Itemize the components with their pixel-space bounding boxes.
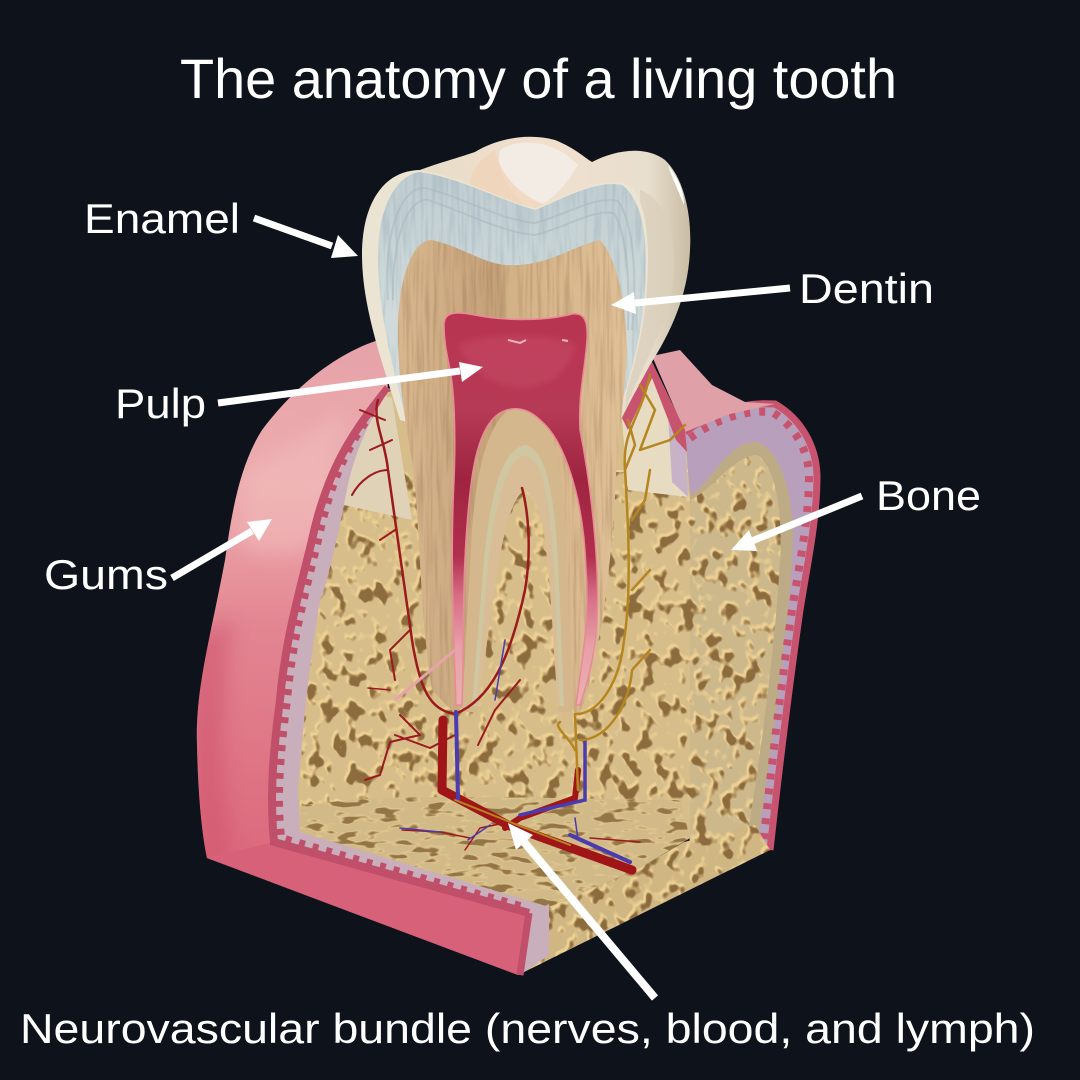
label: Bone [731,472,981,551]
illustration: tooth in jaw cross-section [190,137,817,980]
tooth: dentin [396,238,628,718]
arrow: Dentin [611,288,790,314]
label: Neurovascular bundle [20,823,1035,1052]
label: Pulp: Pulp [115,380,206,427]
label: Bone: Bone [876,472,981,519]
label: Enamel [84,195,358,258]
tooth: pulp chamber and root canals [444,313,598,705]
tooth: enamel [362,170,648,422]
gums: right side roof [622,350,775,452]
arrow: Neurovascular bundle [508,823,655,998]
label: Gums: Gums [44,551,168,598]
label: Enamel: Enamel [84,195,240,242]
blood vessels [352,400,640,870]
label: Gums [44,519,272,598]
label: Dentin: Dentin [799,265,934,312]
bone: spongy cancellous block [290,340,773,980]
arrow: Enamel [254,218,358,258]
label: Neurovascular bundle: Neurovascular bundle (nerves, blood, and lymph) [20,1005,1035,1052]
veins: blue vessels [400,640,630,862]
title: The anatomy of a living tooth [180,47,897,110]
gums and bone: right block face [685,404,817,870]
pink vessel beside root [395,650,455,700]
arrow: Pulp [218,362,483,403]
label: Pulp [115,362,483,427]
tooth: root interior and furcation bone [462,405,572,714]
arrow: Bone [731,496,862,551]
gums: outer pink tissue [190,338,529,975]
nerves: yellow-brown branches [455,375,685,845]
label: Dentin [611,265,934,314]
arrow: Gums [172,519,272,578]
gums: lavender band and cut edge [272,388,549,975]
tooth: crown back surface [400,137,690,420]
